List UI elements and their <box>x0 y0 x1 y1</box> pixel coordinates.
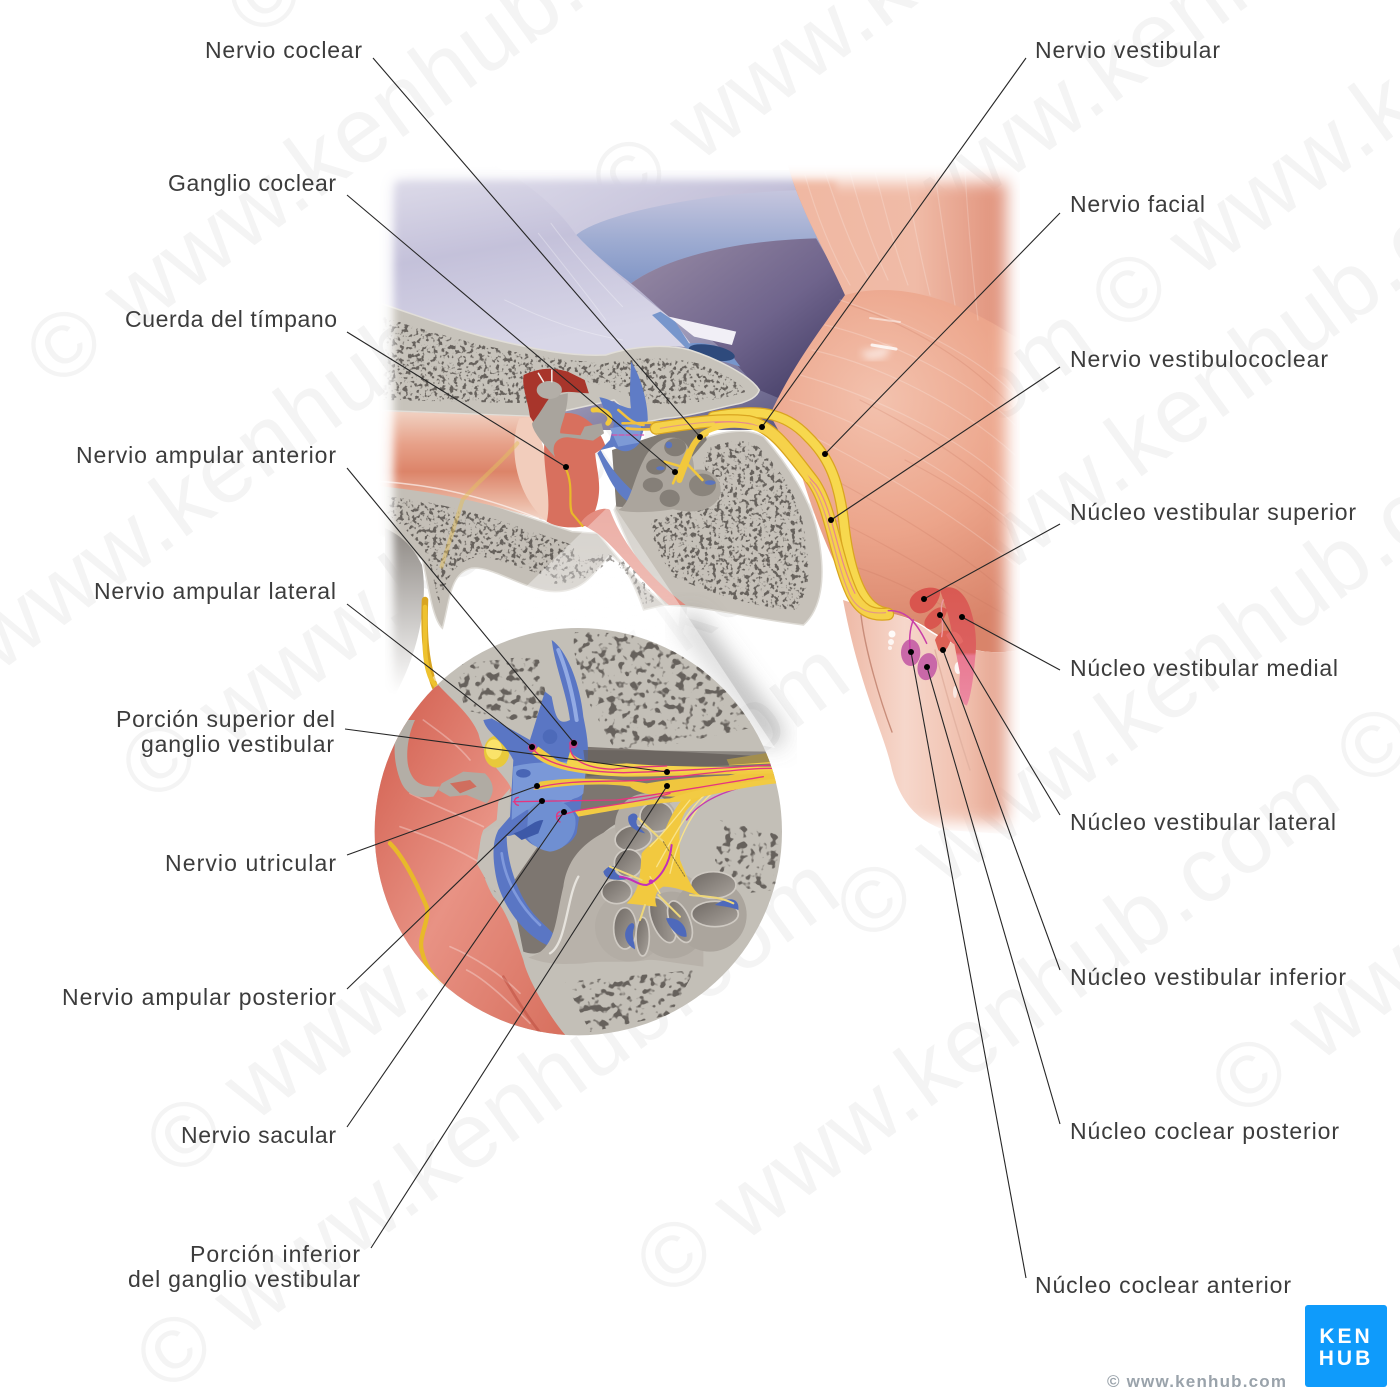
labels right: Nervio vestibulococlear <box>1070 346 1328 372</box>
leader lines and target dots <box>345 58 1060 1278</box>
external auditory canal <box>384 412 548 569</box>
lavender tentorium with blue sinus <box>392 190 845 398</box>
labels right: Nervio vestibular <box>1035 37 1220 63</box>
labels left: Porción inferior <box>190 1241 360 1267</box>
watermark pattern: © www.kenhub.com <box>617 740 1356 1316</box>
logo: Kenhub badge: KEN <box>1319 1325 1373 1348</box>
medulla oblongata <box>843 600 1020 835</box>
labels left: Nervio coclear <box>205 37 362 63</box>
labels left: Nervio sacular <box>181 1122 336 1148</box>
labels right: Núcleo vestibular medial <box>1070 655 1338 681</box>
inset middle ear tissue <box>370 685 567 1040</box>
labels right: Núcleo coclear posterior <box>1070 1118 1339 1144</box>
inset bone base <box>370 620 790 1040</box>
inset chorda tympani <box>390 843 447 990</box>
facial and vestibulocochlear nerve trunks <box>656 413 888 614</box>
labels left: Porción superior del <box>116 706 335 732</box>
labels right: Núcleo vestibular inferior <box>1070 964 1346 990</box>
facial nerve in canal <box>425 600 435 687</box>
main anatomical illustration <box>366 165 1020 835</box>
labels left: ganglio vestibular <box>141 731 334 757</box>
magnifying cone <box>425 503 775 748</box>
labels left: Nervio ampular lateral <box>94 578 336 604</box>
mastoid shadow piece <box>385 528 424 695</box>
labels left: Ganglio coclear <box>168 170 336 196</box>
inset cochlea <box>528 793 747 967</box>
watermark pattern: © www.kenhub.com <box>102 245 841 821</box>
labels right: Nervio facial <box>1070 191 1205 217</box>
watermark pattern: © www.kenhub.com <box>372 285 1111 861</box>
labels right: Núcleo coclear anterior <box>1035 1272 1291 1298</box>
inset cochlear nerve <box>610 768 778 920</box>
inset ossicle: stapes <box>395 720 509 803</box>
inset membranous labyrinth <box>483 640 588 945</box>
labels right <box>1035 37 1356 1298</box>
labels left: Cuerda del tímpano <box>125 306 337 332</box>
vestibular and cochlear nuclei <box>888 587 976 706</box>
brainstem: pons and peduncle <box>770 165 1020 652</box>
middle ear and ossicles <box>523 369 686 605</box>
logo: Kenhub badge <box>1305 1305 1387 1387</box>
inset spongy bone texture <box>454 632 780 1032</box>
inset: magnified inner ear <box>370 620 790 1040</box>
cranial cavity backdrop <box>394 173 826 430</box>
labels left <box>62 37 362 1292</box>
copyright url: © www.kenhub.com <box>1107 1372 1286 1391</box>
labels left: Nervio ampular posterior <box>62 984 336 1010</box>
labels left: del ganglio vestibular <box>128 1266 360 1292</box>
logo: Kenhub badge: HUB <box>1319 1347 1373 1370</box>
watermark pattern: © www.kenhub.com <box>127 620 866 1196</box>
inset cochlear recess shadow <box>510 747 778 954</box>
labels right: Núcleo vestibular lateral <box>1070 809 1336 835</box>
labels left: Nervio utricular <box>165 850 336 876</box>
watermark pattern: © www.kenhub.com <box>117 835 856 1400</box>
spongy bone texture <box>383 317 809 610</box>
inset bony fragment <box>477 788 510 903</box>
inset vestibular nerve branches <box>513 740 777 822</box>
labels right: Núcleo vestibular superior <box>1070 499 1356 525</box>
labels left: Nervio ampular anterior <box>76 442 336 468</box>
temporal bone sections <box>366 300 822 628</box>
inner ear miniature: labyrinth and cochlea <box>593 362 721 512</box>
